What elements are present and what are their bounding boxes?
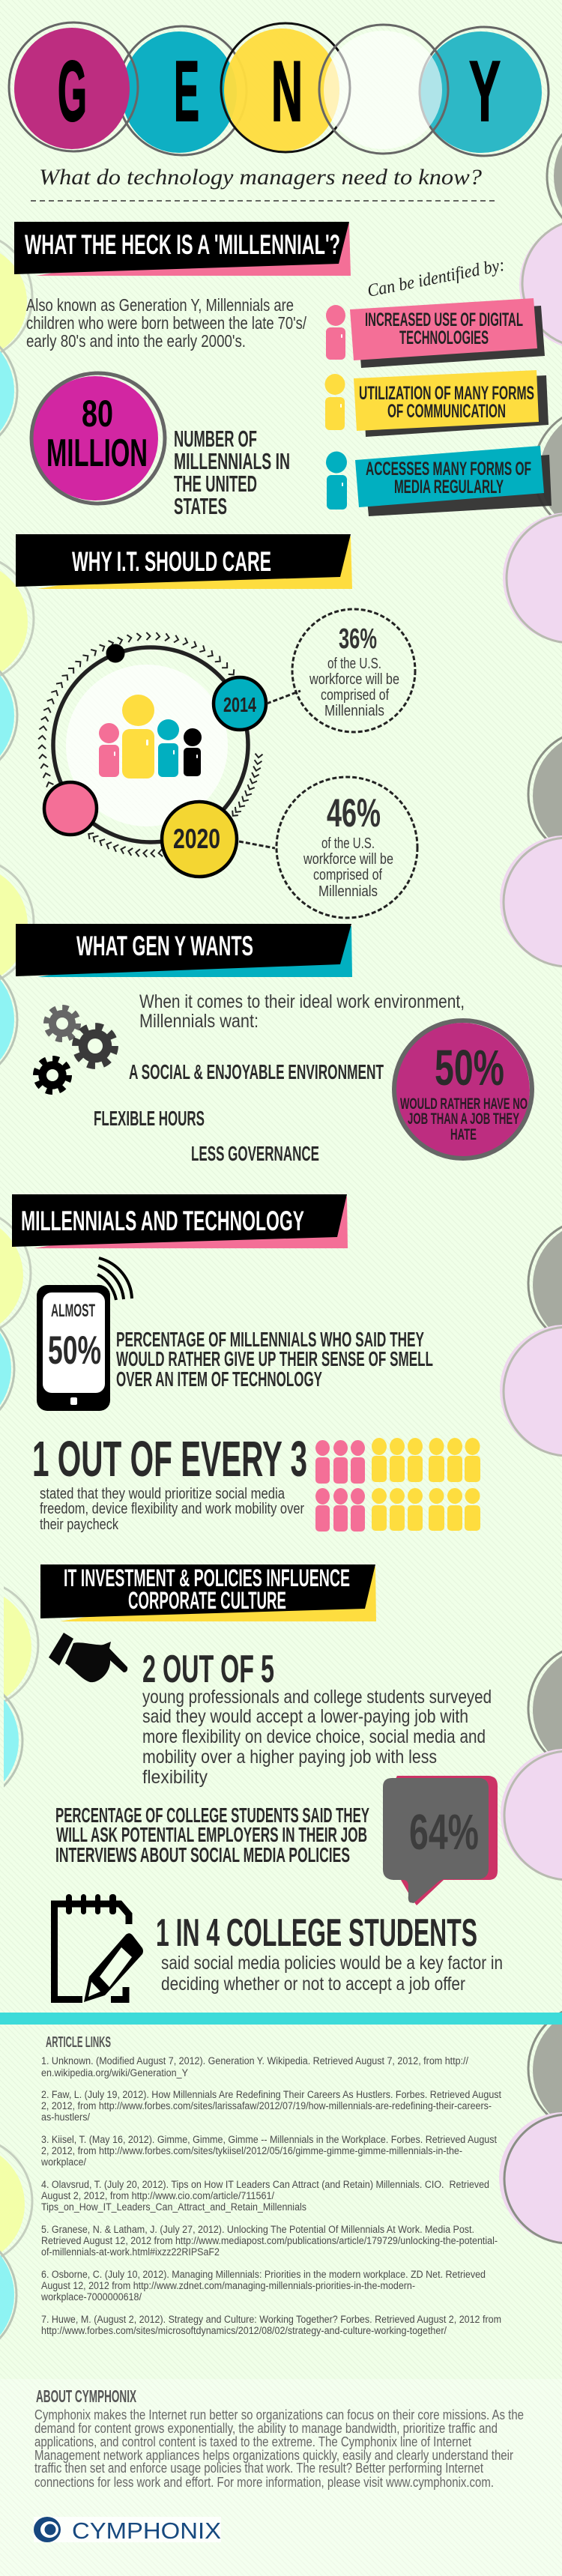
text: paycheck: freedom, device flexibility and work mobility over bbox=[40, 1500, 304, 1517]
icon: pointing hand bbox=[49, 1633, 127, 1682]
text: paycheck: their paycheck bbox=[40, 1516, 119, 1533]
heading: IT investment and policies bbox=[40, 1564, 376, 1621]
text: definition paragraph: early 80's and into the early 2000's. bbox=[26, 331, 246, 351]
text: give up sense of smell: OVER AN ITEM OF TECHNOLOGY bbox=[116, 1367, 322, 1391]
divider band bbox=[0, 2013, 562, 2025]
panel: article links bbox=[40, 2034, 501, 2336]
heading: IT investment and policies: CORPORATE CULTURE bbox=[128, 1587, 286, 1614]
text: paycheck: stated that they would prioritize social media bbox=[40, 1485, 285, 1502]
callout: can be identified by: Can be identified by: bbox=[366, 256, 507, 301]
text: flexibility paragraph: mobility over a higher paying job with less bbox=[142, 1747, 437, 1768]
circle Y bbox=[420, 27, 549, 156]
reference 5: Retrieved August 12, 2012 from http://www.mediapost.com/publications/article/179729/unlocking-the-potential- bbox=[41, 2235, 498, 2246]
circle Y: Y bbox=[469, 44, 501, 139]
heading: why IT should care: WHY I.T. SHOULD CARE bbox=[72, 546, 271, 577]
signal waves bbox=[97, 1258, 132, 1300]
icon: 2020 node bbox=[162, 802, 237, 877]
reference 4: 4. Olavsrud, T. (July 20, 2012). Tips on How IT Leaders Can Attract (and Retain) Millennials. CIO. Retrieved bbox=[41, 2179, 489, 2190]
reference 6: 6. Osborne, C. (July 10, 2012). Managing Millennials: Priorities in the modern workplace. ZD Net. Retrieved bbox=[41, 2269, 486, 2280]
text: definition paragraph: Also known as Generation Y, Millennials are bbox=[26, 295, 294, 315]
subtitle: What do technology managers need to know? bbox=[39, 165, 482, 190]
reference 1: en.wikipedia.org/wiki/Generation_Y bbox=[41, 2067, 188, 2078]
trait: digital technologies: TECHNOLOGIES bbox=[399, 327, 489, 348]
callout: 46 percent: 46% bbox=[327, 791, 381, 835]
callout: 36 percent: 36% bbox=[339, 623, 377, 655]
icon: phone with almost 50 percent: 50% bbox=[48, 1328, 101, 1373]
reference 2: 2. Faw, L. (July 19, 2012). How Millennials Are Redefining Their Careers As Hustlers. Forbes. Retrieved August bbox=[41, 2089, 501, 2100]
white disc and ring bbox=[53, 647, 248, 842]
text: wants list: A SOCIAL & ENJOYABLE ENVIRONMENT bbox=[129, 1060, 384, 1083]
icon: pink node bbox=[44, 782, 97, 835]
text: key factor: deciding whether or not to accept a job offer bbox=[161, 1974, 465, 1995]
reference 3: 3. Kiisel, T. (May 16, 2012). Gimme, Gimme, Gimme -- Millennials in the Workplace. Forbes. Retrieved August bbox=[41, 2134, 497, 2145]
callout: 64 percent speech bubble: 64% bbox=[409, 1804, 479, 1860]
icon: 2020 node: 2020 bbox=[173, 823, 220, 854]
reference 2 bbox=[41, 2089, 501, 2123]
circle N: N bbox=[271, 44, 303, 139]
reference 4 bbox=[41, 2179, 489, 2213]
icon: gears bbox=[37, 1009, 114, 1091]
chart: people grid one in three bbox=[315, 1438, 480, 1532]
text: ideal work environment intro: Millennials want: bbox=[139, 1011, 259, 1032]
reference 1: 1. Unknown. (Modified August 7, 2012). Generation Y. Wikipedia. Retrieved August 7, 2012, from http:// bbox=[41, 2055, 468, 2066]
icon: phone with almost 50 percent: ALMOST bbox=[51, 1301, 95, 1321]
reference 1 bbox=[41, 2055, 468, 2078]
reference 5: 5. Granese, N. & Latham, J. (July 27, 2012). Unlocking The Potential Of Millennials At Work. Media Post. bbox=[41, 2224, 474, 2235]
callout: 46 percent: of the U.S. bbox=[321, 835, 375, 852]
text: flexibility paragraph: young professionals and college students surveyed bbox=[142, 1687, 492, 1708]
text: wants list: FLEXIBLE HOURS bbox=[94, 1107, 205, 1130]
text: wants list bbox=[94, 1060, 384, 1165]
text: about paragraph bbox=[34, 2407, 524, 2490]
circle E bbox=[118, 26, 247, 155]
icon: notebook and pencil bbox=[54, 1894, 143, 2002]
stat: 2 out of 5: 2 OUT OF 5 bbox=[142, 1648, 274, 1691]
panel: 80 million stat bbox=[31, 373, 290, 519]
text: ideal work environment intro bbox=[139, 991, 465, 1032]
icon: 2014 node bbox=[214, 677, 266, 730]
text: flexibility paragraph: said they would accept a lower-paying job with bbox=[142, 1706, 468, 1727]
heading: millennials and technology bbox=[12, 1194, 348, 1248]
circle blank bbox=[319, 25, 448, 154]
stat circle bbox=[31, 373, 165, 504]
heading: about cymphonix: ABOUT CYMPHONIX bbox=[36, 2386, 136, 2406]
heading: what the heck is a millennial bbox=[14, 222, 351, 276]
stat circle: MILLION bbox=[46, 432, 148, 475]
trait: digital technologies bbox=[326, 298, 545, 368]
text: key factor bbox=[161, 1953, 503, 1995]
circle E: E bbox=[174, 44, 199, 139]
icon: family of people bbox=[99, 695, 202, 778]
heading: IT investment and policies: IT INVESTMENT & POLICIES INFLUENCE bbox=[64, 1564, 350, 1591]
stat label: THE UNITED bbox=[174, 471, 257, 497]
text: definition paragraph bbox=[26, 295, 306, 351]
text: flexibility paragraph bbox=[142, 1687, 492, 1788]
reference 6: August 12, 2012 from http://www.zdnet.com/managing-millennials-priorities-in-the-modern- bbox=[41, 2280, 415, 2291]
title: GEN Y circles bbox=[9, 22, 549, 156]
heading: millennials and technology: MILLENNIALS AND TECHNOLOGY bbox=[21, 1206, 304, 1236]
circle N bbox=[221, 23, 350, 152]
callout: 46 percent: comprised of bbox=[313, 867, 382, 883]
stat circle: 80 bbox=[82, 393, 113, 435]
text: interview policies: WILL ASK POTENTIAL EMPLOYERS IN THEIR JOB bbox=[56, 1823, 367, 1846]
stat label: MILLENNIALS IN bbox=[174, 448, 290, 474]
stat label: STATES bbox=[174, 493, 227, 519]
trait: media bbox=[326, 446, 552, 516]
reference 6: workplace-7000000618/ bbox=[40, 2291, 142, 2303]
reference 7: 7. Huwe, M. (August 2, 2012). Strategy and Culture: Working Together? Forbes. Retrieved August 2, 2012 from bbox=[41, 2314, 501, 2325]
text: definition paragraph: children who were born between the late 70's/ bbox=[26, 313, 306, 333]
callout: 46 percent: workforce will be bbox=[303, 851, 393, 868]
reference 7 bbox=[41, 2314, 501, 2336]
stat circle: 50 percent no job bbox=[394, 1021, 532, 1158]
text: give up sense of smell bbox=[116, 1328, 433, 1391]
icon: black dot bbox=[106, 644, 124, 662]
circle G bbox=[9, 22, 138, 151]
circle G: G bbox=[58, 44, 87, 139]
reference 5 bbox=[41, 2224, 498, 2258]
text: wants list: LESS GOVERNANCE bbox=[191, 1142, 319, 1165]
text: interview policies: INTERVIEWS ABOUT SOCIAL MEDIA POLICIES bbox=[55, 1843, 350, 1866]
heading: why IT should care bbox=[16, 534, 352, 589]
callout: 36 percent: comprised of bbox=[321, 687, 389, 704]
panel: timeline cycle bbox=[38, 609, 417, 918]
heading: article links: ARTICLE LINKS bbox=[46, 2034, 111, 2051]
trait: communication bbox=[325, 370, 549, 437]
reference 6 bbox=[40, 2269, 486, 2303]
reference 4: Tips_on_How_IT_Leaders_Can_Attract_and_Retain_Millennials bbox=[41, 2201, 306, 2213]
icon: phone with almost 50 percent bbox=[37, 1258, 132, 1411]
heading: what gen y wants bbox=[16, 924, 352, 977]
callout: 64 percent speech bubble bbox=[383, 1776, 498, 1905]
stat circle: 50 percent no job: 50% bbox=[435, 1040, 504, 1096]
text: interview policies bbox=[55, 1803, 369, 1866]
reference 3: workplace/ bbox=[40, 2156, 86, 2168]
reference 2: as-hustlers/ bbox=[41, 2111, 90, 2123]
reference 5: of-millennials-at-work.html#ixzz22RIPSaF2 bbox=[41, 2246, 220, 2258]
callout: 36 percent: of the U.S. bbox=[327, 656, 381, 672]
text: about paragraph: applications, and control content is taxed to the extreme. The Cymphonix line of Internet bbox=[34, 2434, 471, 2449]
reference 3 bbox=[40, 2134, 497, 2168]
reference 3: 2, 2012, from http://www.forbes.com/sites/tykiisel/2012/05/16/gimme-gimme-gimme-millennials-in-the- bbox=[41, 2145, 462, 2156]
reference 4: August 2, 2012, from http://www.cio.com/article/711561/ bbox=[41, 2190, 274, 2201]
stat circle: 50 percent no job: HATE bbox=[450, 1126, 477, 1143]
reference 7: http://www.forbes.com/sites/microsoftdynamics/2012/08/02/strategy-and-culture-working-together/ bbox=[41, 2325, 447, 2336]
heading: what the heck is a millennial: WHAT THE HECK IS A 'MILLENNIAL'? bbox=[25, 229, 340, 260]
text: paycheck bbox=[40, 1485, 304, 1533]
text: flexibility paragraph: flexibility bbox=[142, 1767, 208, 1788]
text: flexibility paragraph: more flexibility on device choice, social media and bbox=[142, 1726, 486, 1747]
arrows: chevron ring bbox=[38, 632, 262, 857]
panel: about cymphonix bbox=[0, 2379, 562, 2576]
panel: traits list bbox=[325, 298, 552, 516]
callout: 46 percent bbox=[239, 777, 417, 918]
stat: 1 out of every 3: 1 OUT OF EVERY 3 bbox=[32, 1431, 307, 1487]
callout: 36 percent: Millennials bbox=[324, 703, 384, 719]
heading: what gen y wants: WHAT GEN Y WANTS bbox=[76, 931, 253, 961]
callout: 46 percent: Millennials bbox=[318, 883, 378, 900]
stat label: NUMBER OF bbox=[174, 426, 257, 452]
callout: 36 percent: workforce will be bbox=[309, 671, 399, 688]
callout: 36 percent bbox=[267, 609, 415, 732]
stat label bbox=[174, 426, 290, 519]
icon: 2014 node: 2014 bbox=[223, 693, 256, 716]
logo: cymphonix: CYMPHONIX bbox=[72, 2518, 221, 2544]
text: ideal work environment intro: When it comes to their ideal work environment, bbox=[139, 991, 465, 1012]
reference 2: 2, 2012, from http://www.forbes.com/sites/larissafaw/2012/07/19/how-millennials-are-redefining-their-careers- bbox=[41, 2100, 492, 2111]
